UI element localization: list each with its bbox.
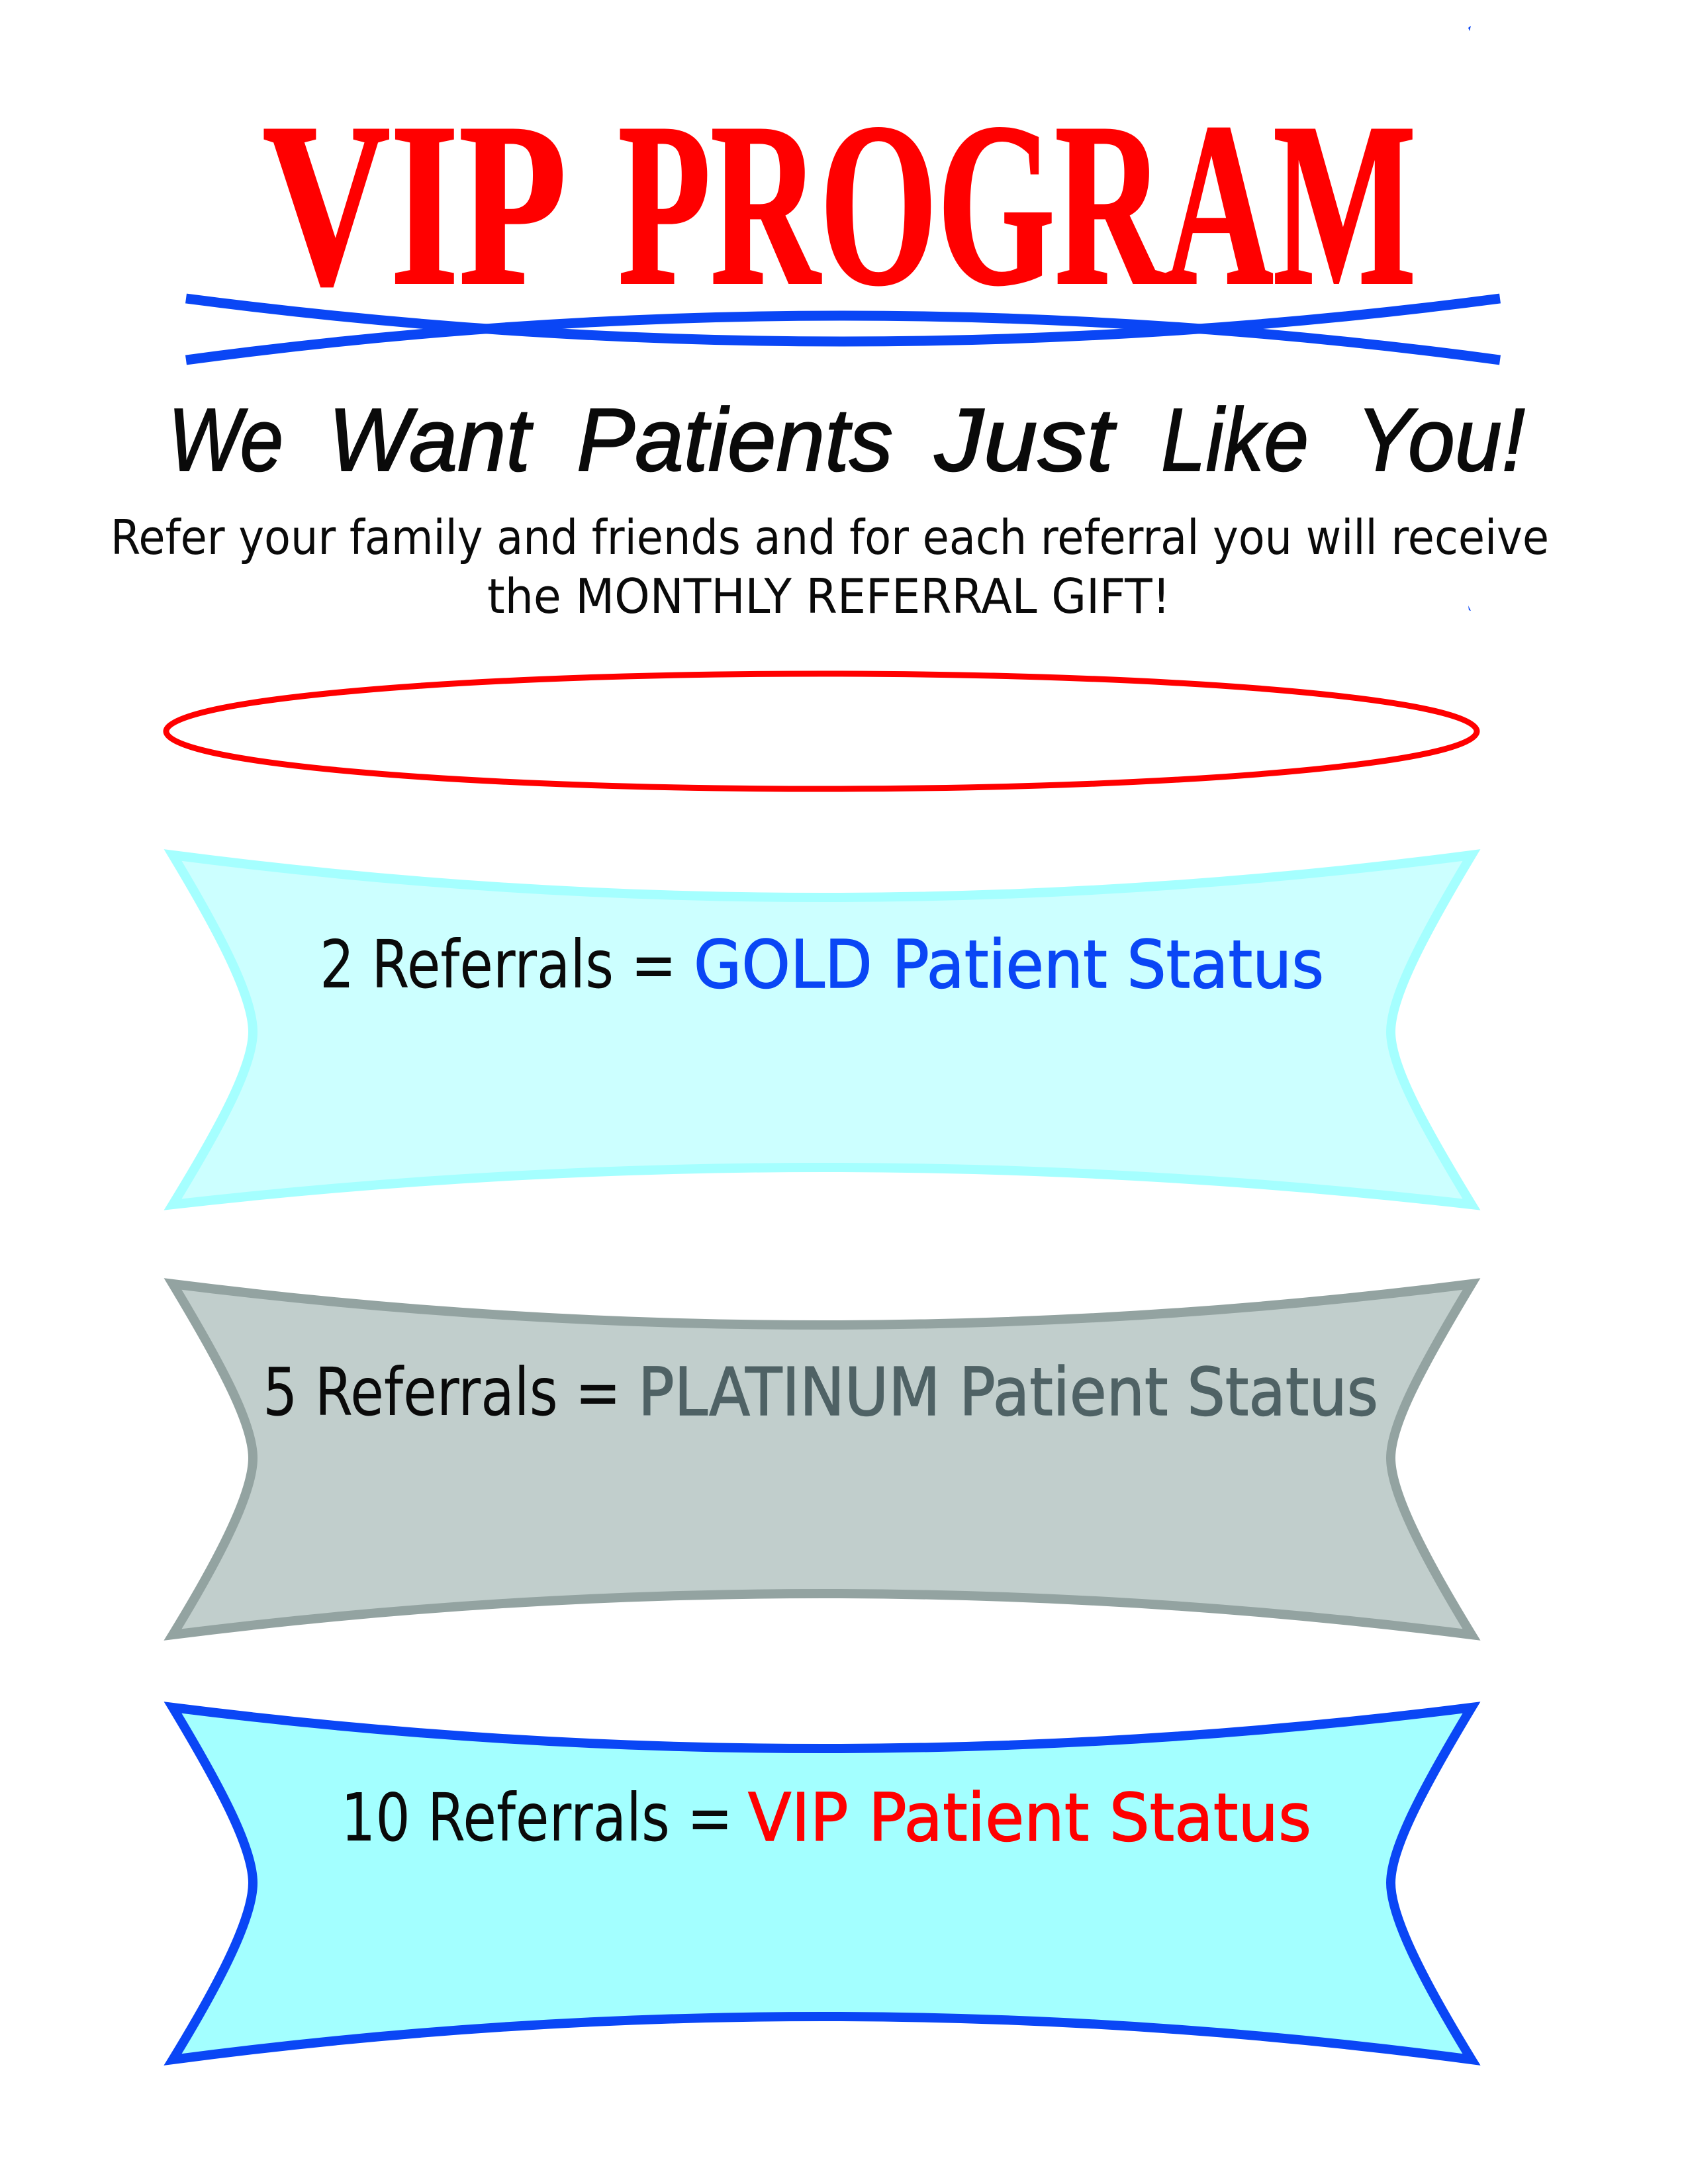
intro line 1: Refer your family and friends and for each referral you will receive	[111, 510, 1549, 565]
tagline: Like	[1161, 390, 1309, 490]
platinum banner label: 5 Referrals =	[263, 1353, 621, 1431]
platinum banner shape	[173, 1284, 1472, 1635]
vip banner label	[341, 1779, 1311, 1856]
banner: gold status	[173, 855, 1472, 1205]
gold banner label	[320, 926, 1324, 1003]
intro text	[111, 510, 1549, 624]
gold banner label: 2 Referrals =	[320, 926, 677, 1003]
title	[263, 75, 1416, 334]
intro line 2: the MONTHLY REFERRAL GIFT!	[487, 569, 1170, 624]
tagline: You!	[1356, 390, 1525, 490]
tagline: We	[168, 390, 283, 490]
red empty oval	[166, 674, 1477, 789]
platinum banner label	[263, 1353, 1378, 1431]
vip banner shape	[173, 1707, 1472, 2060]
vip banner label: VIP Patient Status	[748, 1779, 1311, 1856]
vip banner label: 10 Referrals =	[341, 1779, 733, 1856]
banner: platinum status	[173, 1284, 1472, 1635]
gold banner shape	[173, 855, 1472, 1205]
platinum banner label: PLATINUM Patient Status	[638, 1353, 1378, 1431]
gold banner label: GOLD Patient Status	[694, 926, 1324, 1003]
tagline: Patients	[577, 390, 893, 490]
title: VIP	[263, 75, 567, 334]
tagline	[168, 390, 1525, 490]
tagline: Want	[328, 390, 534, 490]
tagline: Just	[934, 390, 1117, 490]
banner: vip status	[173, 1707, 1472, 2060]
crossed blue swashes	[186, 298, 1500, 360]
